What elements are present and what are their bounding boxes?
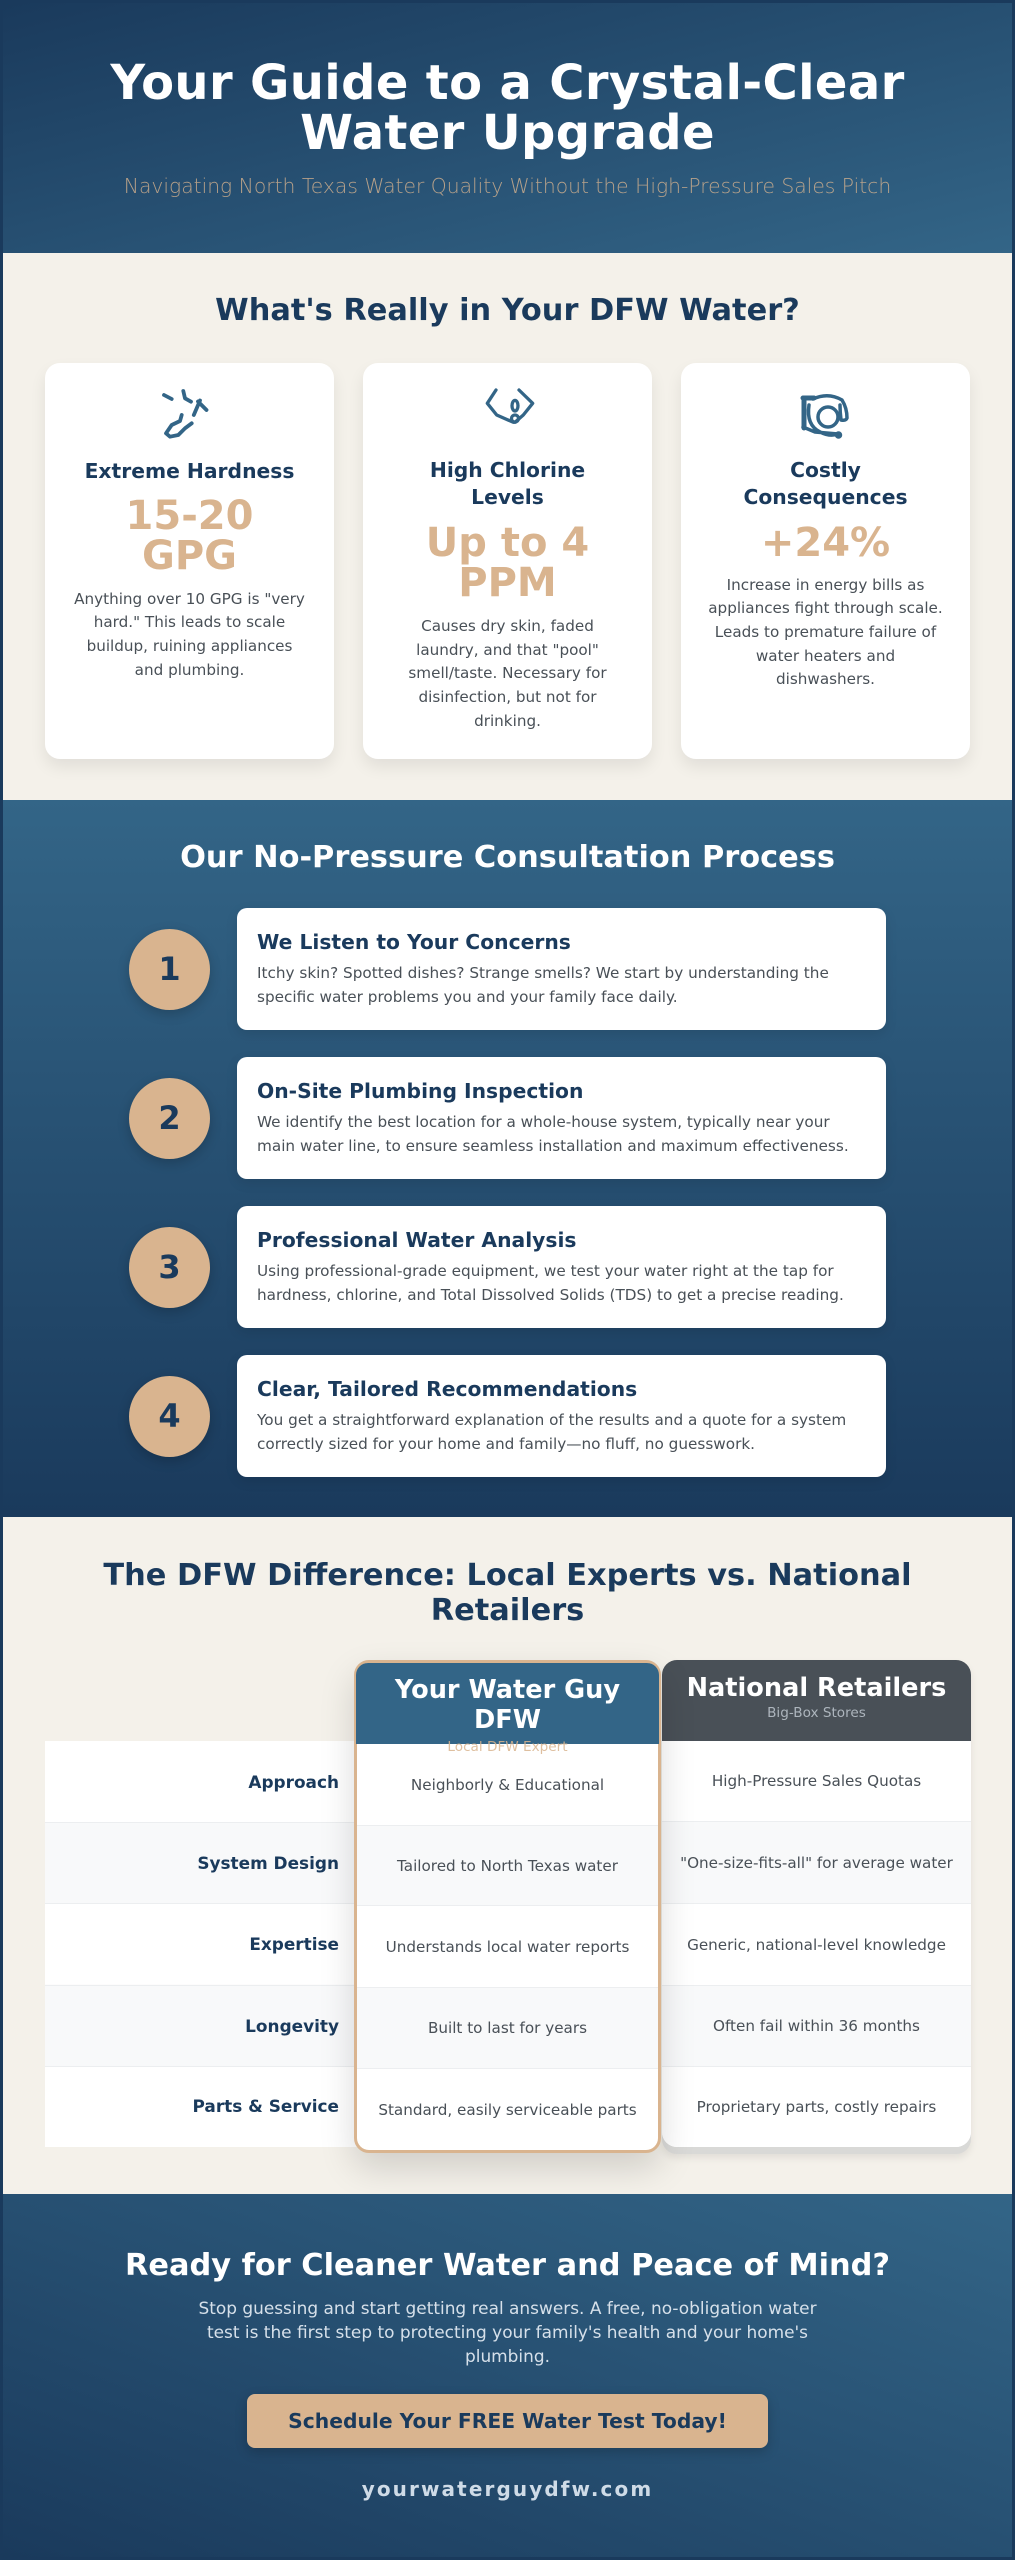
description bbox=[74, 590, 305, 679]
description: disinfection, but not for bbox=[418, 688, 597, 706]
panel: comparison bbox=[3, 1517, 1012, 2194]
step 3 text: hardness, chlorine, and Total Dissolved Solids (TDS) to get a precise reading. bbox=[257, 1286, 844, 1304]
row: parts bbox=[357, 2068, 658, 2150]
row: expertise bbox=[662, 1903, 971, 1985]
step 3 number bbox=[129, 1227, 210, 1308]
stat: Up to 4 bbox=[426, 520, 589, 566]
card heading: Extreme Hardness bbox=[85, 459, 294, 483]
row: expertise: Generic, national-level knowledge bbox=[687, 1936, 946, 1954]
local subtitle: Local DFW Expert bbox=[447, 1739, 568, 1755]
header panel bbox=[3, 3, 1012, 253]
row: parts: Standard, easily serviceable parts bbox=[378, 2100, 637, 2118]
row: longevity: Often fail within 36 months bbox=[713, 2017, 920, 2035]
label: parts and service: Parts & Service bbox=[192, 2096, 339, 2116]
description: laundry, and that "pool" bbox=[416, 641, 599, 659]
step 3 number: 3 bbox=[158, 1248, 181, 1286]
row: expertise: Understands local water reports bbox=[386, 1938, 629, 1956]
step 3 heading: Professional Water Analysis bbox=[257, 1228, 576, 1252]
row: design: Tailored to North Texas water bbox=[397, 1856, 618, 1874]
step 1 heading: We Listen to Your Concerns bbox=[257, 930, 571, 954]
row: parts: Proprietary parts, costly repairs bbox=[697, 2098, 936, 2116]
label: longevity: Longevity bbox=[245, 2016, 339, 2036]
card: costly consequences bbox=[681, 363, 970, 759]
step 2 text: We identify the best location for a whole-house system, typically near your bbox=[257, 1113, 830, 1131]
row: approach bbox=[662, 1740, 971, 1821]
step 3 card bbox=[237, 1206, 886, 1328]
description: Anything over 10 GPG is "very bbox=[74, 590, 305, 608]
description: Leads to premature failure of bbox=[715, 623, 936, 641]
description bbox=[708, 576, 943, 688]
row: design bbox=[662, 1821, 971, 1903]
step 4 card bbox=[237, 1355, 886, 1477]
description: Increase in energy bills as bbox=[727, 576, 924, 594]
icon: water drop bbox=[486, 388, 534, 424]
description: drinking. bbox=[474, 712, 541, 730]
call to action text bbox=[198, 2298, 817, 2366]
description: water heaters and bbox=[756, 647, 895, 665]
column: national retailers bbox=[662, 1660, 971, 2154]
row: design bbox=[357, 1825, 658, 1905]
step 4 text: correctly sized for your home and family—no fluff, no guesswork. bbox=[257, 1435, 755, 1453]
step 1 card bbox=[237, 908, 886, 1030]
button: Schedule Your FREE Water Test Today! bbox=[288, 2409, 727, 2433]
step 4 text bbox=[257, 1411, 846, 1453]
card heading: Consequences bbox=[743, 485, 908, 509]
national rows bbox=[662, 1741, 971, 2147]
step 3 text bbox=[257, 1262, 844, 1304]
comparison row labels bbox=[45, 1741, 365, 2147]
stat bbox=[126, 492, 253, 578]
card heading: Costly bbox=[790, 458, 861, 482]
title: Water Upgrade bbox=[300, 105, 715, 161]
call to action text: plumbing. bbox=[465, 2346, 550, 2366]
description bbox=[408, 617, 607, 730]
description: dishwashers. bbox=[776, 670, 875, 688]
column: your water guy bbox=[354, 1660, 661, 2153]
description: and plumbing. bbox=[135, 661, 244, 679]
description: hard." This leads to scale bbox=[94, 613, 285, 631]
heading: consultation process: Our No-Pressure Consultation Process bbox=[180, 840, 835, 875]
step 4 heading: Clear, Tailored Recommendations bbox=[257, 1376, 637, 1400]
website: yourwaterguydfw.com bbox=[362, 2477, 653, 2501]
call to action text: test is the first step to protecting your family's health and your home's bbox=[207, 2322, 808, 2342]
local title bbox=[394, 1675, 620, 1735]
step 4 text: You get a straightforward explanation of the results and a quote for a system bbox=[257, 1411, 846, 1429]
row: approach: Neighborly & Educational bbox=[411, 1776, 604, 1794]
row: longevity bbox=[357, 1987, 658, 2068]
stat: 15-20 bbox=[126, 492, 253, 538]
description: buildup, ruining appliances bbox=[87, 637, 292, 655]
panel: call to action bbox=[3, 2194, 1012, 2557]
row: design: "One-size-fits-all" for average water bbox=[680, 1854, 953, 1872]
national subtitle: Big-Box Stores bbox=[767, 1705, 866, 1721]
national header bbox=[662, 1660, 971, 1741]
step 1 text: specific water problems you and your family face daily. bbox=[257, 988, 678, 1006]
heading: comparison: Retailers bbox=[431, 1592, 584, 1628]
step 2 text bbox=[257, 1113, 849, 1155]
title bbox=[110, 55, 905, 161]
panel: water problems bbox=[3, 253, 1012, 800]
row: longevity: Built to last for years bbox=[428, 2019, 587, 2037]
card heading bbox=[430, 458, 585, 509]
step 2 number bbox=[129, 1078, 210, 1159]
panel: consultation process bbox=[3, 800, 1012, 1517]
button bbox=[247, 2394, 768, 2448]
step 1 number bbox=[129, 929, 210, 1010]
subtitle: Navigating North Texas Water Quality Without the High-Pressure Sales Pitch bbox=[124, 174, 891, 198]
row: expertise bbox=[357, 1905, 658, 1987]
row: approach: High-Pressure Sales Quotas bbox=[712, 1772, 921, 1790]
row: longevity bbox=[662, 1985, 971, 2066]
step 1 number: 1 bbox=[158, 950, 181, 988]
step 2 text: main water line, to ensure seamless installation and maximum effectiveness. bbox=[257, 1137, 849, 1155]
heading: comparison: The DFW Difference: Local Experts vs. National bbox=[103, 1558, 912, 1592]
stat bbox=[426, 520, 589, 606]
label: system design: System Design bbox=[197, 1852, 339, 1872]
title: Your Guide to a Crystal-Clear bbox=[110, 55, 905, 111]
step 2 heading: On-Site Plumbing Inspection bbox=[257, 1078, 583, 1102]
description: appliances fight through scale. bbox=[708, 599, 943, 617]
icon: appliance bbox=[800, 394, 849, 439]
icon: faucet bbox=[162, 389, 208, 439]
card: high chlorine bbox=[363, 363, 652, 759]
label: approach: Approach bbox=[248, 1772, 339, 1792]
national title: National Retailers bbox=[687, 1673, 946, 1703]
step 4 number: 4 bbox=[158, 1397, 181, 1435]
label: expertise: Expertise bbox=[249, 1934, 339, 1954]
card heading: Levels bbox=[471, 485, 544, 509]
local title: Your Water Guy bbox=[395, 1675, 620, 1705]
card heading: High Chlorine bbox=[430, 458, 585, 482]
step 3 text: Using professional-grade equipment, we test your water right at the tap for bbox=[257, 1262, 834, 1280]
step 2 number: 2 bbox=[158, 1099, 181, 1137]
step 4 number bbox=[129, 1376, 210, 1457]
card: extreme hardness bbox=[45, 363, 334, 759]
step 1 text: Itchy skin? Spotted dishes? Strange smells? We start by understanding the bbox=[257, 964, 829, 982]
stat: +24% bbox=[761, 520, 890, 566]
local header bbox=[356, 1663, 659, 1744]
local title: DFW bbox=[474, 1705, 541, 1735]
heading: water problems: What's Really in Your DFW Water? bbox=[215, 293, 800, 328]
call to action heading: Ready for Cleaner Water and Peace of Mind? bbox=[125, 2248, 890, 2283]
card heading bbox=[743, 458, 908, 509]
description: smell/taste. Necessary for bbox=[408, 664, 607, 682]
step 1 text bbox=[257, 964, 829, 1006]
description: Causes dry skin, faded bbox=[421, 617, 594, 635]
call to action text: Stop guessing and start getting real answers. A free, no-obligation water bbox=[198, 2298, 817, 2318]
heading: comparison bbox=[103, 1558, 912, 1628]
stat: GPG bbox=[142, 532, 237, 578]
stat: PPM bbox=[458, 560, 557, 606]
row: parts bbox=[662, 2066, 971, 2147]
step 2 card bbox=[237, 1057, 886, 1179]
